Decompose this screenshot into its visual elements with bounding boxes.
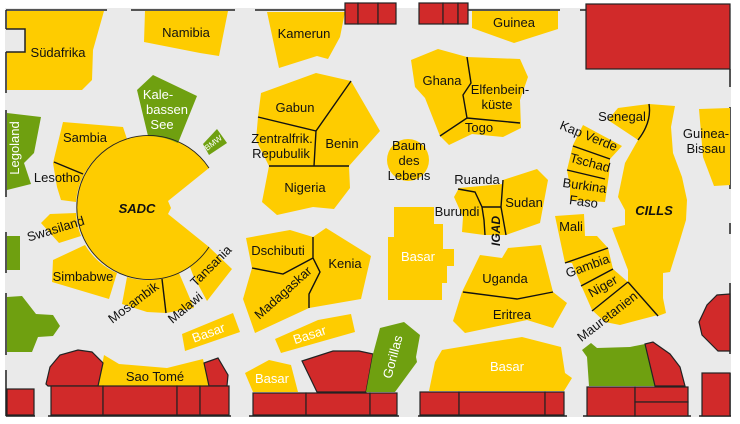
panel: Sao Tomé: Sao Tomé	[126, 369, 184, 384]
panel: Kalebassen See: See	[150, 117, 174, 132]
panel: Guinea-Bissau: Guinea-	[683, 126, 729, 141]
panel: Basar centre	[388, 207, 454, 300]
panel: IGAD group: Sudan	[505, 195, 543, 210]
panel: Gorillas	[366, 322, 420, 392]
panel: Kap Verde, Tschad, Burkina Faso: Tschad	[568, 150, 612, 175]
panel: Simbabwe	[52, 245, 117, 299]
panel: Namibia	[144, 11, 228, 56]
panel: Uganda and Eritrea: Eritrea	[493, 307, 532, 322]
panel: CILLS	[612, 104, 687, 316]
panel: Basar middle: Basar	[291, 322, 329, 347]
panel: red row bottom centre	[253, 392, 564, 415]
panel: Basar centre: Basar	[401, 249, 436, 264]
panel: Kap Verde, Tschad, Burkina Faso: Faso	[568, 192, 599, 211]
panel: Swasiland: Swasiland	[25, 213, 86, 245]
panel: Sambia and Lesotho	[34, 122, 127, 202]
panel: Namibia: Namibia	[162, 25, 211, 40]
panel: Mosambik and Malawi: Malawi	[165, 289, 206, 326]
panel: Mosambik and Malawi: Mosambik	[105, 278, 162, 326]
panel: Ghana, Elfenbeinküste, Togo: Togo	[465, 120, 493, 135]
panel: Dschibuti, Madagaskar, Kenia: Kenia	[328, 256, 362, 271]
panel: Basar left: Basar	[190, 320, 228, 346]
panel: Baum des Lebens: Lebens	[388, 168, 431, 183]
panel: Südafrika	[5, 11, 104, 90]
panel: IGAD group	[435, 169, 548, 246]
panel: Mauretanien: Mauretanien	[574, 288, 640, 345]
panel: Mali, Gambia, Niger: Niger	[586, 272, 621, 300]
panel: IGAD group: Ruanda	[454, 172, 501, 187]
panel: red buildings right	[699, 294, 730, 416]
panel: Simbabwe: Simbabwe	[53, 269, 113, 284]
panel: Dschibuti, Madagaskar, Kenia: Dschibuti	[251, 243, 305, 258]
panel: BMW	[203, 129, 227, 155]
panel: Dschibuti, Madagaskar, Kenia	[243, 228, 371, 333]
panel: Gabun, Benin, Zentralafrik. Republik, Nigeria: Benin	[325, 136, 359, 151]
panel: Ghana, Elfenbeinküste, Togo: Elfenbein-	[471, 82, 529, 97]
panel: Basar lower: Basar	[255, 371, 290, 386]
panel: Basar middle	[275, 314, 355, 353]
panel: Kalebassen See: Kale-	[143, 87, 173, 102]
panel: CILLS: CILLS	[635, 203, 673, 218]
panel: Sambia and Lesotho: Lesotho	[34, 170, 80, 185]
panel: Kamerun: Kamerun	[278, 26, 330, 41]
panel: Baum des Lebens: des	[399, 153, 420, 168]
panel: Gabun, Benin, Zentralafrik. Republik, Nigeria: Nigeria	[284, 180, 326, 195]
panel: Guinea	[472, 11, 558, 43]
panel: SADC	[77, 135, 209, 280]
panel: Uganda and Eritrea	[453, 245, 567, 333]
panel: Senegal: Senegal	[598, 109, 646, 124]
panel: Mali, Gambia, Niger: Mali	[559, 219, 583, 234]
panel: Baum des Lebens	[387, 138, 431, 183]
panel: Gabun, Benin, Zentralafrik. Republik, Nigeria: Repubulik	[252, 146, 310, 161]
panel: Mosambik and Malawi	[105, 273, 206, 326]
panel: Mali, Gambia, Niger: Gambia	[564, 251, 612, 281]
panel: red buildings bottom left	[7, 350, 229, 415]
panel: BMW: BMW	[203, 133, 224, 153]
panel: Kalebassen See	[137, 75, 197, 143]
panel: Mali, Gambia, Niger	[555, 214, 628, 310]
panel: Guinea: Guinea	[493, 15, 536, 30]
panel: Ghana, Elfenbeinküste, Togo: Ghana	[422, 73, 462, 88]
panel: Legoland	[7, 113, 41, 190]
panel: Kap Verde, Tschad, Burkina Faso: Kap Verde	[558, 118, 620, 154]
panel: Guinea-Bissau: Bissau	[686, 141, 726, 156]
panel: Gabun, Benin, Zentralafrik. Republik, Nigeria: Gabun	[275, 100, 315, 115]
panel: red building centre	[302, 351, 373, 392]
panel: Ghana, Elfenbeinküste, Togo	[411, 49, 529, 145]
panel: IGAD group: IGAD	[489, 216, 503, 246]
panel: Kalebassen See: bassen	[146, 102, 188, 117]
panel: Dschibuti, Madagaskar, Kenia: Madagaskar	[251, 263, 315, 322]
panel: Baum des Lebens: Baum	[392, 138, 426, 153]
panel: Gabun, Benin, Zentralafrik. Republik, Nigeria	[251, 73, 380, 215]
panel: green areas left	[7, 236, 60, 352]
panel: Gabun, Benin, Zentralafrik. Republik, Nigeria: Zentralfrik.	[251, 131, 313, 146]
panel: Kamerun	[267, 12, 345, 68]
panel: red buildings top	[345, 3, 730, 69]
panel: Basar large: Basar	[490, 359, 525, 374]
panel: Uganda and Eritrea: Uganda	[482, 271, 529, 286]
panel: Gorillas: Gorillas	[380, 333, 406, 380]
panel: SADC: SADC	[119, 201, 156, 216]
panel: Basar large	[429, 337, 572, 391]
panel: green and red bottom right	[582, 342, 688, 416]
panel: Basar left	[182, 313, 240, 351]
panel: Senegal	[598, 104, 650, 140]
panel: Basar lower	[245, 360, 298, 392]
panel: Tansania: Tansania	[187, 242, 235, 290]
panel: Sambia and Lesotho: Sambia	[63, 130, 108, 145]
panel: IGAD group: Burundi	[435, 204, 480, 219]
panel: Südafrika: Südafrika	[31, 45, 86, 60]
panel: Kap Verde, Tschad, Burkina Faso: Burkina	[562, 175, 608, 196]
panel: Guinea-Bissau	[683, 108, 730, 186]
panel: Ghana, Elfenbeinküste, Togo: küste	[481, 97, 513, 112]
panel: Legoland: Legoland	[7, 121, 22, 175]
panel: Kap Verde, Tschad, Burkina Faso	[558, 118, 622, 211]
panel: Sao Tomé	[98, 355, 209, 386]
